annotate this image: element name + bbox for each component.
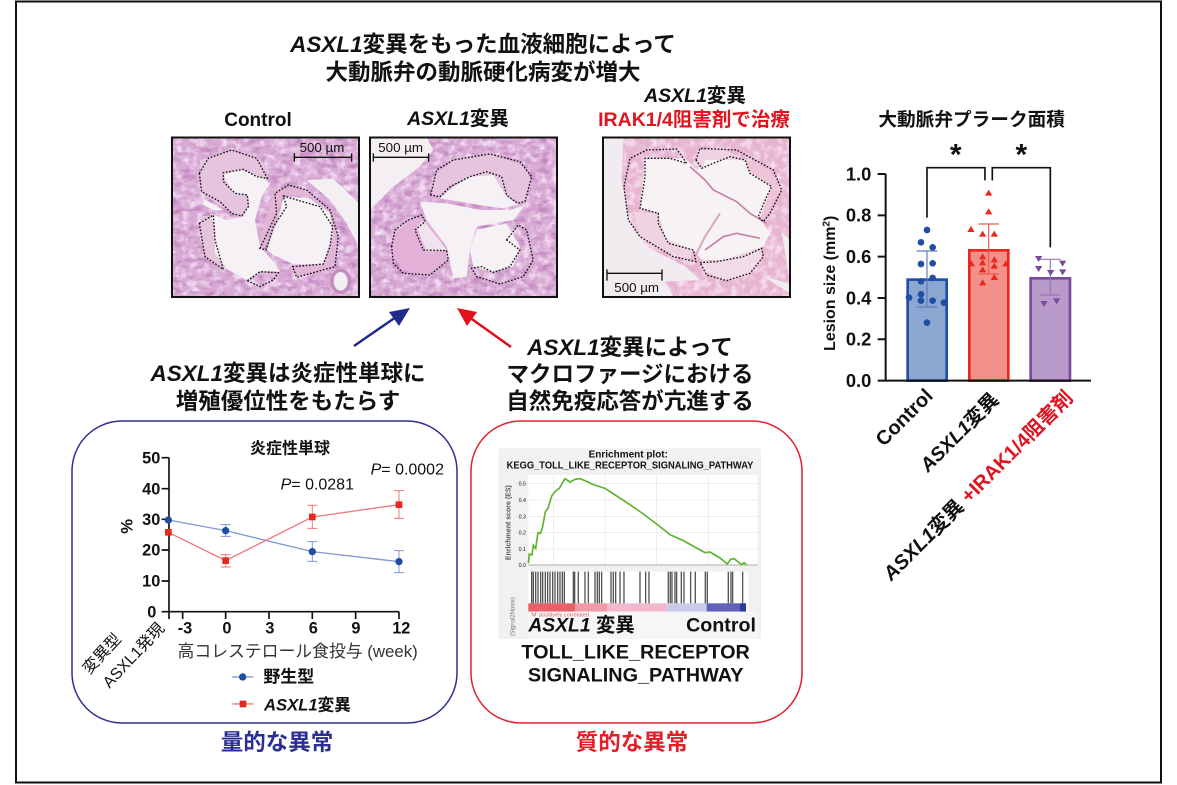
rotated label: ASXL1発現 [99,620,168,692]
arrow: red [457,308,511,347]
y axis labels: 1.0 [846,163,871,184]
y axis labels: 0.1 [519,547,526,553]
text: innate immune response: 自然免疫応答が亢進する [506,388,754,414]
enrichment plot: Enrichment score (ES) [506,485,513,560]
legend: 野生型 [263,668,314,687]
plot title: Enrichment plot: [589,450,668,461]
x label: ASXL1 + inhibitor: ASXL1変異 +IRAK1/4阻害剤 [878,386,1078,586]
ASXL1 series [165,491,404,567]
y axis labels: 0.2 [519,531,526,537]
y axis labels: 0.6 [846,246,871,267]
y axis labels: 0.4 [846,287,872,308]
micrograph: treatment [603,137,790,297]
enrichment plot: (Signal2Noise) [511,597,517,636]
y axis labels: 0.4 [519,498,526,504]
line chart: inflammatory monocytes: P= 0.0002 [371,461,444,478]
micrograph: treatment: 500 µm [614,280,659,295]
y axis labels: 0 [147,603,156,621]
scale bar [294,153,352,162]
y axis labels: 0.8 [846,205,871,226]
panel: qualitative abnormality [471,421,802,723]
chart title: 炎症性単球 [250,438,330,457]
main title [289,32,676,85]
y axis labels: 0.5 [519,482,526,488]
x axis title: 高コレステロール食投与 (week) [178,642,418,661]
x axis labels: 3 [265,619,275,637]
heading: treatment: IRAK1/4阻害剤で治療 [598,109,790,131]
y axis title: 2 [822,221,833,227]
y axis labels [142,449,160,621]
y axis title: ) [822,216,839,221]
x label: ASXL1: ASXL1変異 [915,389,1004,477]
label: qualitative: 質的な異常 [576,730,688,755]
y axis labels: 0.0 [519,563,526,569]
hit barcode [532,572,743,603]
text: proliferative advantage: 増殖優位性をもたらす [176,389,400,414]
y axis labels [519,482,526,569]
heading: treatment: ASXL1変異 [643,85,746,107]
axes [878,174,1091,381]
enrichment plot: Control [686,615,756,637]
y axis labels [846,163,872,391]
text: innate immune response [506,335,754,414]
enrichment curve [528,479,747,565]
frame: control [172,138,359,297]
scale bar [373,153,429,162]
label: quantitative: 量的な異常 [221,730,333,755]
rotated label: 変異型 [79,630,125,678]
significance stars: * [950,139,962,172]
x axis labels: 6 [309,619,318,637]
frame: ASXL1 [370,138,557,297]
enrichment plot [498,448,761,686]
heading: ASXL1 mutation: ASXL1変異 [406,108,509,130]
text: innate immune response: マクロファージにおける [506,362,754,387]
axes [162,458,399,619]
x label: Control: Control [872,385,938,451]
frame: treatment [603,138,790,297]
ASXL1 points [967,190,1010,285]
error bars [917,251,937,307]
micrograph: control [172,137,359,297]
y axis labels: 40 [142,480,160,498]
panel: histology control [172,110,359,297]
legend [232,668,351,715]
significance stars: * [1015,139,1027,172]
wild-type series [165,516,404,573]
panel: histology IRAK treatment [598,85,790,297]
group labels: ASXL1 変異 [527,615,635,637]
micrograph: control: 500 µm [300,140,344,155]
line chart: inflammatory monocytes [79,438,444,715]
ranking colour bar [528,603,746,612]
y axis labels: 20 [142,542,160,560]
text: proliferative advantage: ASXL1変異は炎症性単球に [149,361,426,386]
y axis labels: 50 [142,449,160,467]
pathway name: SIGNALING_PATHWAY [528,664,743,686]
y axis labels: 0.3 [519,514,526,520]
bars [908,250,1070,381]
main title: 大動脈弁の動脈硬化病変が増大 [325,59,641,85]
x axis labels: -3 [178,619,192,637]
x axis labels: 0 [222,619,232,637]
chart title: 大動脈弁プラーク面積 [878,109,1065,130]
y axis labels: 0.2 [846,329,871,350]
p values: P= 0.0281 [281,477,354,494]
enrichment plot: 'M' positively correlated [531,613,589,619]
y axis labels: 0.0 [846,370,871,391]
bar chart: plaque area [822,109,1091,391]
heading: treatment [598,85,790,131]
scale bar [607,269,662,281]
pathway name [521,642,750,686]
significance stars [950,139,1027,172]
heading: control: Control [224,110,292,131]
text: innate immune response: ASXL1変異によって [526,335,733,360]
panel: quantitative abnormality [72,421,457,723]
pathway name: TOLL_LIKE_RECEPTOR [521,642,750,664]
plot title: KEGG_TOLL_LIKE_RECEPTOR_SIGNALING_PATHWAY [507,461,754,472]
x axis labels [178,619,410,637]
plot title [507,450,754,472]
y axis title: % [118,519,137,534]
main title: ASXL1変異をもった血液細胞によって [289,32,676,57]
micrograph: ASXL1: 500 µm [378,140,423,155]
text: proliferative advantage [149,361,426,414]
panel: histology ASXL1 [370,108,557,297]
y axis labels: 10 [142,573,160,591]
y axis labels: 30 [142,511,160,529]
control points [906,227,947,326]
y axis title: Lesion size (mm [822,227,839,351]
significance brackets [927,168,1050,247]
legend: ASXL1変異 [263,696,351,715]
x axis labels: 9 [351,619,361,637]
x axis labels: 12 [392,619,410,637]
micrograph: ASXL1 [370,137,557,297]
treated points [1035,256,1066,307]
arrow: blue [354,308,410,346]
